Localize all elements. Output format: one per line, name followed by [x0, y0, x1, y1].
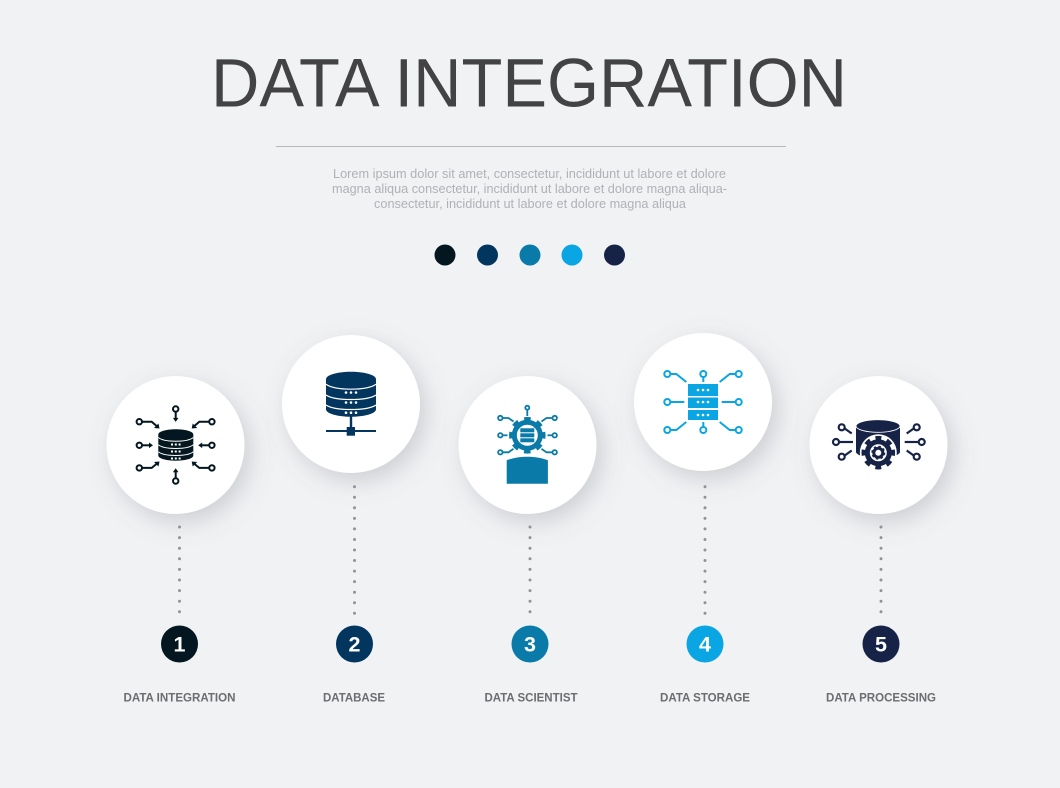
step 5: data processing — [810, 376, 948, 704]
label 5: DATA PROCESSING — [826, 690, 936, 704]
step 2: database — [282, 335, 420, 704]
label 1: DATA INTEGRATION — [124, 690, 236, 704]
dotted connector 3 — [528, 527, 532, 615]
circle panel 2 — [282, 335, 420, 473]
intro text block: magna aliqua consectetur, incididunt ut labore et dolore magna aliqua- — [332, 182, 727, 196]
step 1: data integration — [106, 376, 244, 704]
icon: database with gear — [833, 420, 925, 471]
label 3: DATA SCIENTIST — [484, 690, 578, 704]
number badge 5 — [862, 626, 900, 662]
number badge 5: 5 — [875, 633, 887, 657]
number badge 2 — [336, 626, 373, 662]
icon: server with circuit nodes — [664, 371, 742, 433]
number badge 4: 4 — [699, 633, 711, 657]
circle panel 3 — [458, 376, 596, 514]
dotted connector 4 — [704, 487, 706, 615]
icon: person with gear and circuit — [498, 406, 557, 484]
dotted connector 1 — [178, 527, 181, 615]
number badge 2: 2 — [349, 633, 361, 657]
dotted connector 5 — [880, 527, 882, 615]
step 4: data storage — [634, 333, 772, 704]
label 2: DATABASE — [323, 690, 385, 704]
step 3: data scientist — [458, 376, 596, 704]
dotted connector 2 — [353, 487, 356, 615]
circle panel 5 — [810, 376, 948, 514]
number badge 1: 1 — [174, 633, 186, 657]
intro text block — [332, 167, 727, 211]
number badge 4 — [686, 626, 724, 662]
icon: database with inbound arrows — [137, 406, 215, 484]
label 4: DATA STORAGE — [660, 690, 750, 704]
title: DATA INTEGRATION — [211, 44, 847, 122]
intro text block: Lorem ipsum dolor sit amet, consectetur, incididunt ut labore et dolore — [333, 167, 726, 181]
icon: networked database — [326, 372, 376, 436]
number badge 3 — [512, 626, 548, 662]
number badge 1 — [161, 626, 198, 662]
number badge 3: 3 — [524, 633, 536, 657]
circle panel 4 — [634, 333, 772, 471]
intro text block: consectetur, incididunt ut labore et dolore magna aliqua — [374, 197, 686, 211]
circle panel 1 — [106, 376, 244, 514]
colour legend dots — [434, 244, 625, 266]
